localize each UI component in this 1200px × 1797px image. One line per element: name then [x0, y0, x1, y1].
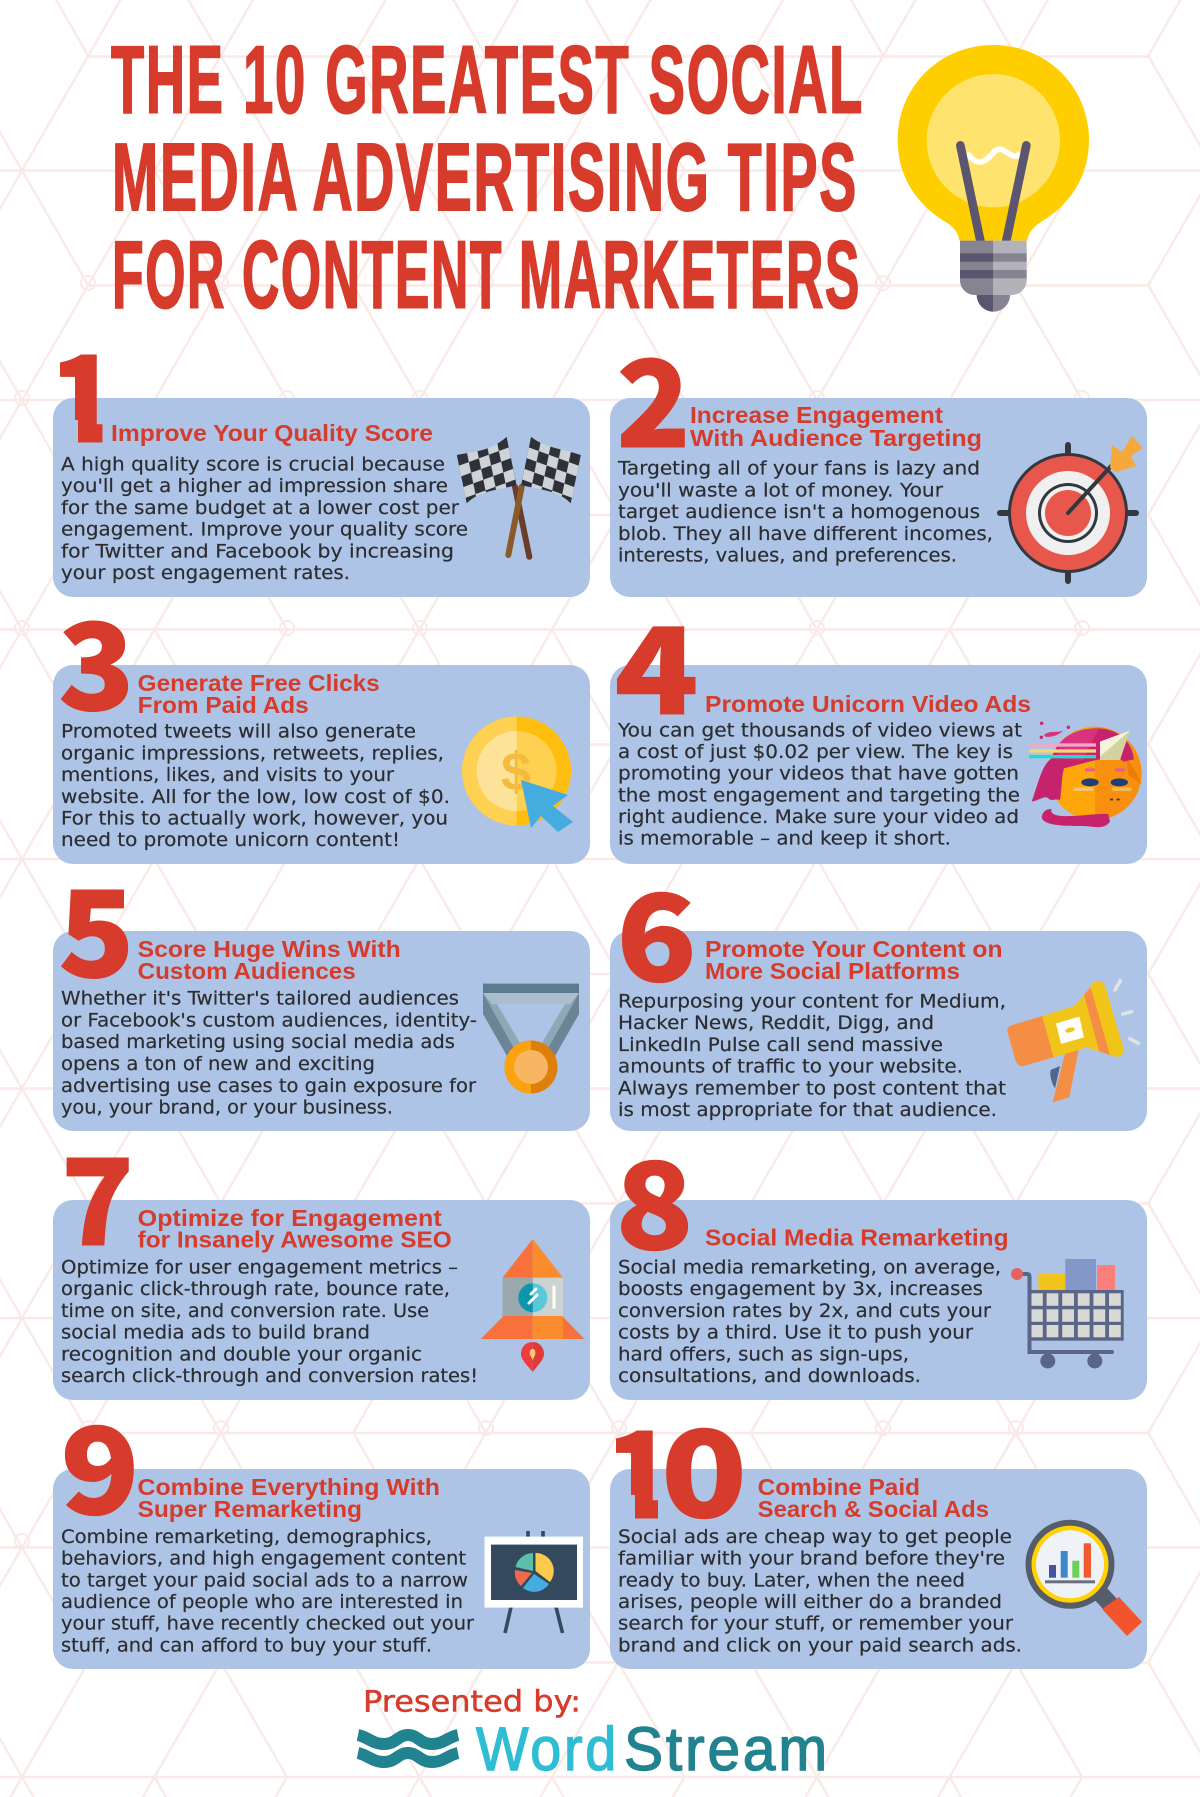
body text: familiar with your brand before they're [618, 1548, 1005, 1570]
number 7: 7 [61, 1106, 134, 1280]
body text: Hacker News, Reddit, Digg, and [618, 1012, 934, 1034]
heading [138, 670, 380, 718]
card background [610, 1200, 1147, 1400]
body text: engagement. Improve your quality score [61, 519, 468, 541]
body text: is most appropriate for that audience. [618, 1099, 997, 1121]
body text: mentions, likes, and visits to your [61, 764, 394, 786]
body text [61, 988, 477, 1119]
heading: With Audience Targeting [690, 425, 982, 451]
body text: your post engagement rates. [61, 562, 350, 584]
body text: organic impressions, retweets, replies, [61, 742, 444, 764]
body text: ready to buy. Later, when the need [618, 1569, 965, 1591]
body text: Repurposing your content for Medium, [618, 990, 1006, 1012]
body text: website. All for the low, low cost of $0. [61, 786, 450, 808]
heading [138, 1474, 440, 1522]
logo wordmark [476, 1715, 830, 1783]
number 9: 9 [60, 1375, 140, 1549]
panel: tip 5 [53, 838, 590, 1131]
panel: tip 10 [610, 1428, 1147, 1669]
card background [53, 1469, 590, 1669]
body text: brand and click on your paid search ads. [618, 1634, 1022, 1656]
body text: consultations, and downloads. [618, 1365, 921, 1387]
card background [610, 1469, 1147, 1669]
body text [61, 720, 450, 851]
heading: Combine Everything With [138, 1474, 440, 1500]
heading [138, 1205, 452, 1253]
body text: for the same budget at a lower cost per [61, 497, 459, 519]
body text: time on site, and conversion rate. Use [61, 1300, 429, 1322]
icon: medal [483, 984, 579, 1094]
body text: amounts of traffic to your website. [618, 1056, 963, 1078]
heading: Promote Your Content on [705, 936, 1002, 962]
heading: Increase Engagement [690, 402, 943, 428]
body text: advertising use cases to gain exposure for [61, 1075, 476, 1097]
WordStream logo [358, 1715, 830, 1783]
heading: Optimize for Engagement [138, 1205, 442, 1231]
body text: your stuff, have recently checked out your [61, 1613, 474, 1635]
body text: interests, values, and preferences. [618, 544, 957, 566]
body text: Combine remarketing, demographics, [61, 1526, 432, 1548]
body text: Targeting all of your fans is lazy and [617, 458, 980, 480]
panel: tip 4 [610, 575, 1147, 864]
body text: you'll waste a lot of money. Your [618, 479, 943, 501]
body text [617, 458, 993, 566]
icon: checkered flags [457, 437, 581, 557]
number 2: 2 [616, 308, 690, 482]
logo wordmark: Word [476, 1715, 619, 1783]
icon: unicorn head [1029, 722, 1142, 827]
icon: megaphone [1007, 981, 1138, 1102]
panel: tip 9 [53, 1375, 590, 1669]
card background [610, 665, 1147, 864]
card background [610, 398, 1147, 597]
body text: promoting your videos that have gotten [618, 763, 1019, 785]
body text: Optimize for user engagement metrics – [61, 1256, 458, 1278]
body text [61, 454, 468, 584]
body text: blob. They all have different incomes, [618, 523, 993, 545]
heading: Search & Social Ads [758, 1496, 989, 1522]
icon: coin with cursor: $ [501, 742, 531, 802]
heading: Custom Audiences [138, 958, 356, 984]
body text [61, 1256, 478, 1387]
body text: or Facebook's custom audiences, identity- [61, 1009, 477, 1031]
heading: Promote Unicorn Video Ads [705, 691, 1031, 717]
body text: boosts engagement by 3x, increases [618, 1278, 983, 1300]
panel: tip 7 [53, 1106, 590, 1400]
body text: search click-through and conversion rates! [61, 1365, 478, 1387]
heading: Combine Paid [758, 1474, 920, 1500]
icon: shopping cart [1011, 1259, 1124, 1368]
heading: Social Media Remarketing [705, 1225, 1009, 1251]
title [111, 26, 864, 328]
number 5: 5 [58, 838, 134, 1012]
body text: you, your brand, or your business. [61, 1097, 393, 1119]
body text: Always remember to post content that [618, 1077, 1006, 1099]
body text: Whether it's Twitter's tailored audiences [61, 988, 459, 1010]
body text: for Twitter and Facebook by increasing [61, 540, 454, 562]
body text: audience of people who are interested in [61, 1591, 463, 1613]
body text: arises, people will either do a branded [618, 1591, 1002, 1613]
logo mark: waves [358, 1735, 458, 1762]
number 6: 6 [616, 842, 696, 1016]
number 8: 8 [616, 1110, 694, 1284]
body text: Social ads are cheap way to get people [618, 1526, 1012, 1548]
presented by label: Presented by: [363, 1685, 581, 1720]
heading [705, 936, 1002, 984]
body text: you'll get a higher ad impression share [61, 475, 448, 497]
body text: A high quality score is crucial because [61, 454, 445, 476]
heading [138, 936, 401, 984]
card background [53, 398, 590, 597]
body text [618, 1256, 1001, 1387]
heading: Improve Your Quality Score [111, 420, 433, 446]
number 10: 0 [661, 1378, 747, 1552]
body text: the most engagement and targeting the [618, 784, 1020, 806]
card background [53, 931, 590, 1131]
body text: Promoted tweets will also generate [61, 720, 416, 742]
panel: tip 1 [53, 354, 590, 597]
icon: target with arrow [1000, 436, 1143, 581]
body text [618, 1526, 1022, 1656]
number 4: 4 [614, 575, 698, 749]
icon: magnifying glass with bar chart [1026, 1520, 1142, 1636]
body text: target audience isn't a homogenous [618, 501, 980, 523]
body text: Social media remarketing, on average, [618, 1256, 1001, 1278]
body text: conversion rates by 2x, and cuts your [618, 1300, 991, 1322]
body text: a cost of just $0.02 per view. The key is [618, 741, 1013, 763]
heading [758, 1474, 989, 1522]
panel: tip 3 [53, 571, 590, 864]
icon: presentation easel with pie chart [484, 1531, 583, 1633]
heading [690, 402, 982, 451]
body text: opens a ton of new and exciting [61, 1053, 375, 1075]
body text: is memorable – and keep it short. [618, 828, 951, 850]
body text: LinkedIn Pulse call send massive [618, 1034, 943, 1056]
body text: You can get thousands of video views at [617, 719, 1022, 741]
heading: From Paid Ads [138, 692, 309, 718]
panel: tip 8 [610, 1110, 1147, 1400]
icon: rocket [481, 1239, 584, 1372]
body text: For this to actually work, however, you [61, 808, 448, 830]
heading: Score Huge Wins With [138, 936, 401, 962]
number 1: 1 [48, 303, 119, 477]
card background [53, 1200, 590, 1400]
number 10: 1 [604, 1379, 675, 1553]
body text: social media ads to build brand [61, 1322, 370, 1344]
body text: right audience. Make sure your video ad [618, 806, 1019, 828]
card background [53, 665, 590, 864]
card background [610, 931, 1147, 1131]
body text: to target your paid social ads to a narrow [61, 1569, 468, 1591]
body text: organic click-through rate, bounce rate, [61, 1278, 450, 1300]
heading: Super Remarketing [138, 1496, 362, 1522]
body text [618, 990, 1006, 1121]
number 3: 3 [58, 571, 134, 745]
panel: tip 2 [610, 308, 1147, 597]
icon: coin with cursor [462, 716, 573, 832]
heading: Generate Free Clicks [138, 670, 380, 696]
body text: recognition and double your organic [61, 1343, 422, 1365]
logo wordmark: Stream [624, 1715, 830, 1783]
body text: costs by a third. Use it to push your [618, 1322, 973, 1344]
body text [61, 1526, 474, 1656]
icon: light bulb [898, 45, 1089, 312]
body text: hard offers, such as sign-ups, [618, 1343, 909, 1365]
body text [617, 719, 1022, 850]
body text: stuff, and can afford to buy your stuff. [61, 1634, 432, 1656]
body text: need to promote unicorn content! [61, 829, 400, 851]
body text: based marketing using social media ads [61, 1031, 455, 1053]
number 10 [616, 1428, 742, 1520]
heading: for Insanely Awesome SEO [138, 1227, 452, 1253]
heading: More Social Platforms [705, 958, 960, 984]
body text: search for your stuff, or remember your [618, 1613, 1013, 1635]
panel: tip 6 [610, 842, 1147, 1131]
body text: behaviors, and high engagement content [61, 1548, 466, 1570]
